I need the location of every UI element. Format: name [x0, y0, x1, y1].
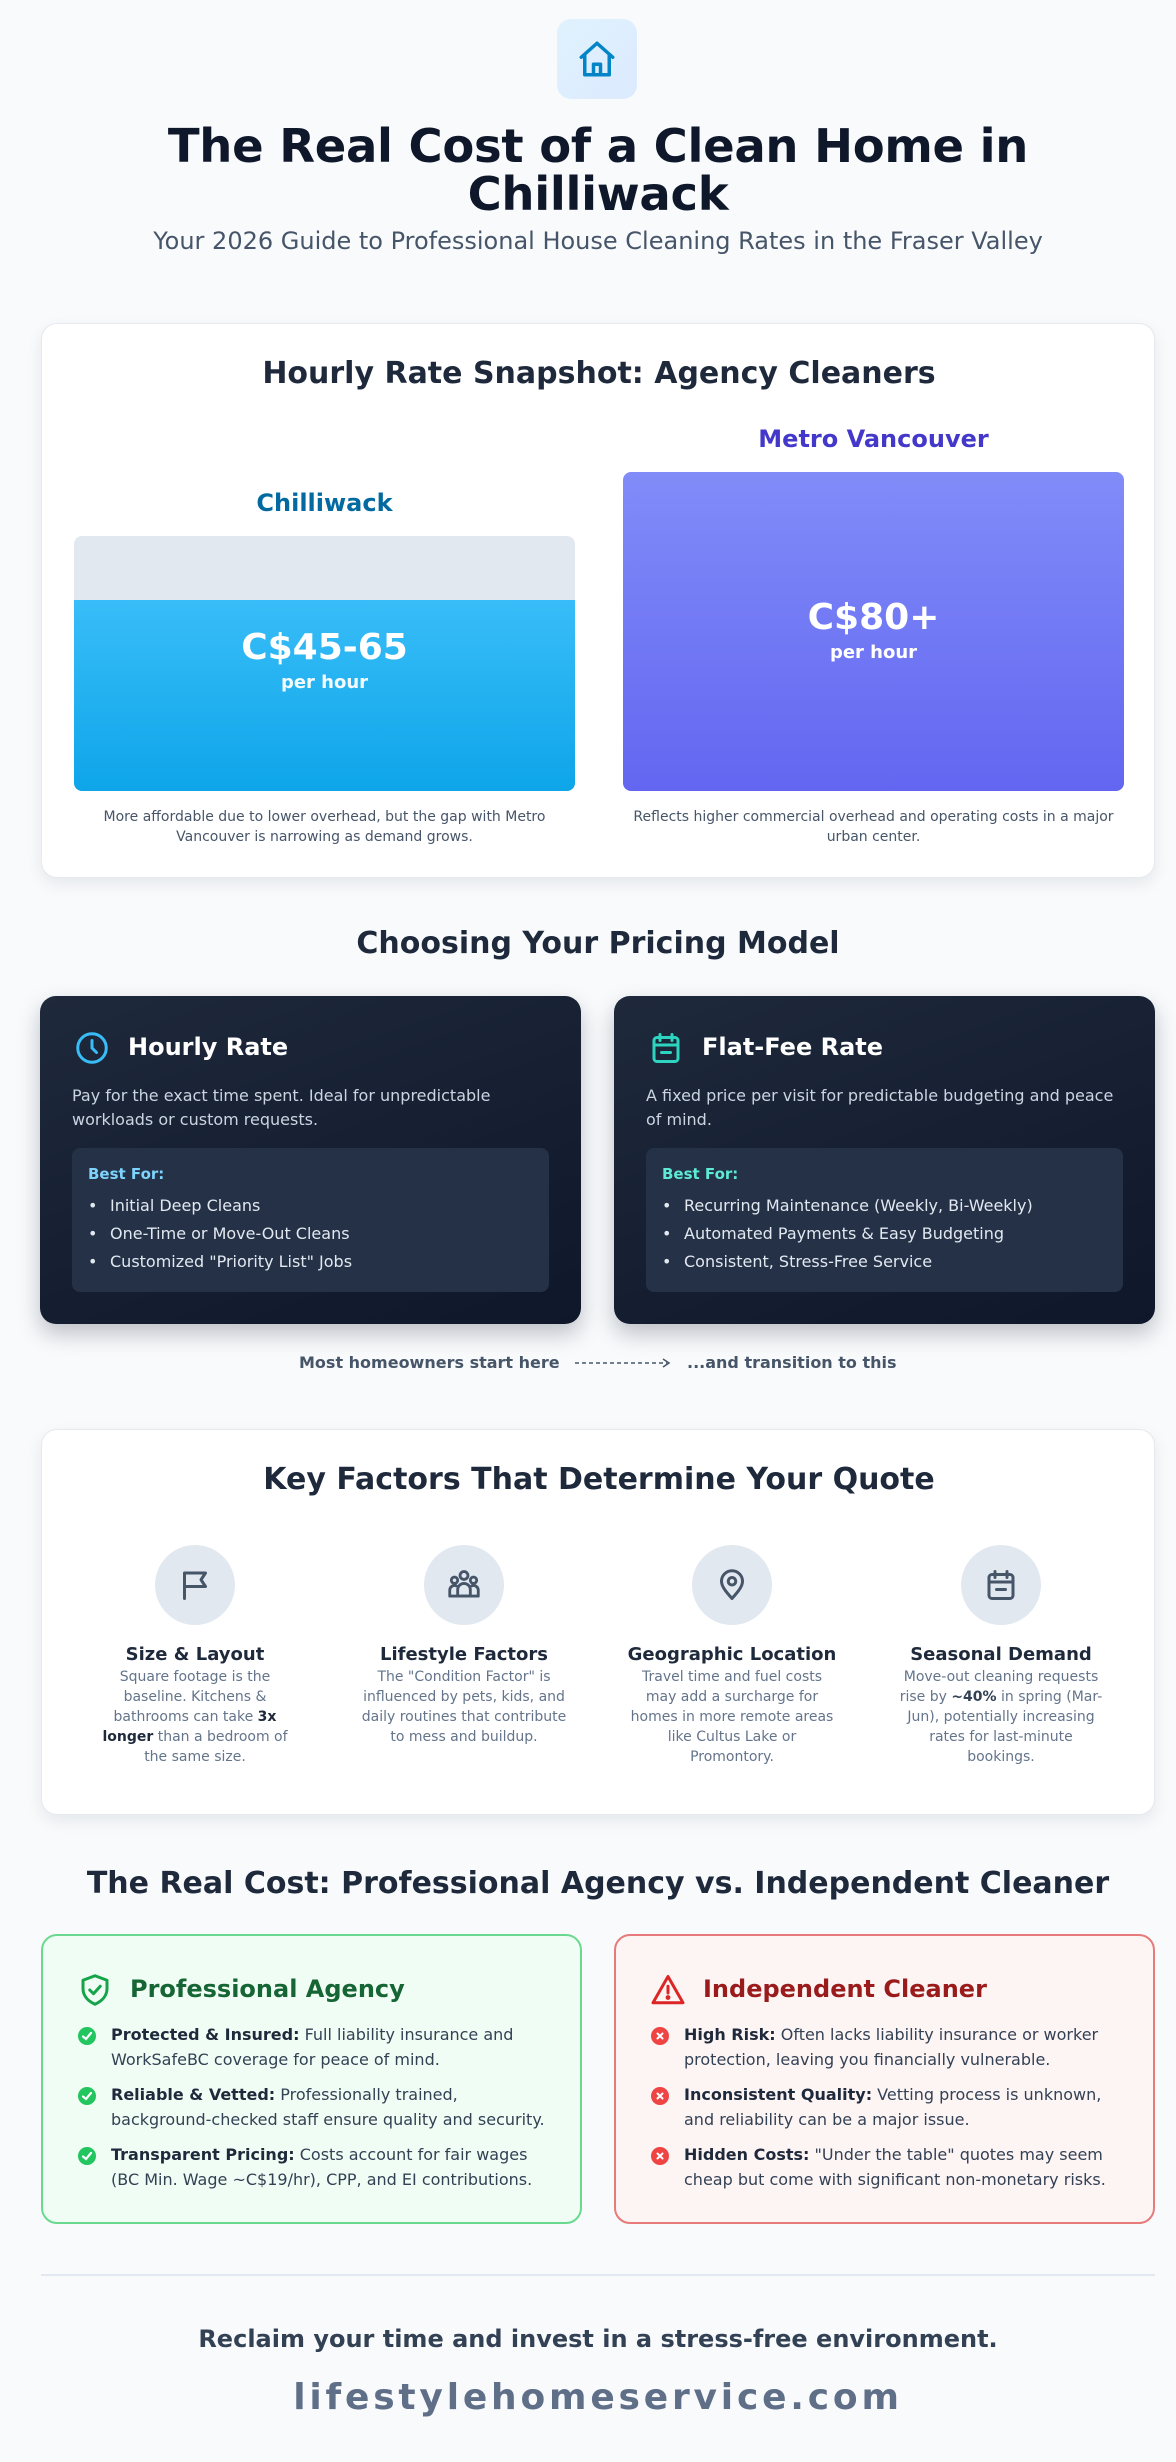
factor: size & layout: [102, 1545, 288, 1765]
title: Chilliwack: [468, 167, 728, 221]
best for list: [72, 1148, 549, 1292]
icon: calendar: [652, 1033, 680, 1063]
factor: seasonal: Move-out cleaning requests rise by ~40% in spring (Mar-Jun), potentially increasing rates for last-minute bookings.: [900, 1669, 1102, 1765]
title: [168, 119, 1028, 221]
icon: shield: [82, 1974, 108, 2006]
bar: Metro Vancouver: per hour: [830, 642, 917, 663]
bar: Metro Vancouver: C$80+: [808, 597, 939, 638]
website url: lifestylehomeservice.com: [293, 2377, 903, 2418]
bar: Chilliwack: C$45-65: [241, 627, 408, 668]
panel: professional agency: Reliable & Vetted: Professionally trained, background-checked staff ensure quality and security.: [111, 2085, 545, 2129]
panel: flat-fee rate: A fixed price per visit for predictable budgeting and peace of mind.: [646, 1086, 1113, 1129]
heading: pricing model: Choosing Your Pricing Model: [356, 926, 840, 961]
factor: lifestyle: The "Condition Factor" is influenced by pets, kids, and daily routines that contribute to mess and buildup.: [362, 1669, 566, 1745]
bar: Metro Vancouver: [623, 472, 1124, 791]
best for list: Automated Payments & Easy Budgeting: [684, 1224, 1004, 1243]
panel: flat-fee rate: [614, 996, 1155, 1324]
factor: lifestyle: [362, 1545, 566, 1745]
title: The Real Cost of a Clean Home in: [168, 119, 1028, 173]
best for list: Best For:: [662, 1165, 738, 1183]
panel: independent cleaner: High Risk: Often lacks liability insurance or worker protection, leaving you financially vulnerable.: [684, 2025, 1098, 2069]
caption: Chilliwack: More affordable due to lower overhead, but the gap with Metro Vancouver is narrowing as demand grows.: [104, 809, 545, 845]
factor: lifestyle: Lifestyle Factors: [380, 1644, 548, 1665]
panel: flat-fee rate: Flat-Fee Rate: [702, 1033, 883, 1061]
bar: Chilliwack: per hour: [281, 672, 368, 693]
panel: hourly rate snapshot: [41, 323, 1155, 878]
icon: clock: [76, 1032, 108, 1064]
best for list: Recurring Maintenance (Weekly, Bi-Weekly): [684, 1196, 1033, 1215]
panel: key factors: [41, 1429, 1155, 1815]
factor: size & layout: Square footage is the baseline. Kitchens & bathrooms can take 3x longer than a bedroom of the same size.: [102, 1669, 288, 1765]
label: Metro Vancouver: Metro Vancouver: [758, 425, 989, 453]
best for list: [646, 1148, 1123, 1292]
heading: key factors: Key Factors That Determine Your Quote: [263, 1462, 935, 1497]
factor: location: Travel time and fuel costs may add a surcharge for homes in more remote areas like Cultus Lake or Promontory.: [631, 1669, 833, 1765]
icon: house: [557, 19, 637, 99]
best for list: Best For:: [88, 1165, 164, 1183]
panel: independent cleaner: Inconsistent Quality: Vetting process is unknown, and reliability can be a major issue.: [684, 2085, 1101, 2129]
best for list: Customized "Priority List" Jobs: [110, 1252, 352, 1271]
label: Chilliwack: Chilliwack: [256, 489, 393, 517]
transition note with arrow: ...and transition to this: [687, 1353, 897, 1372]
best for list: Initial Deep Cleans: [110, 1196, 260, 1215]
factor: location: [628, 1545, 836, 1765]
bar: Chilliwack: [74, 536, 575, 791]
tagline: Reclaim your time and invest in a stress-free environment.: [198, 2325, 998, 2353]
subtitle: Your 2026 Guide to Professional House Cleaning Rates in the Fraser Valley: [153, 227, 1043, 255]
panel: hourly rate: Pay for the exact time spent. Ideal for unpredictable workloads or custom requests.: [72, 1086, 490, 1129]
panel: independent cleaner: Hidden Costs: "Under the table" quotes may seem cheap but come with significant non-monetary risks.: [684, 2145, 1106, 2189]
panel: hourly rate: Hourly Rate: [128, 1033, 288, 1061]
heading: agency vs independent: The Real Cost: Professional Agency vs. Independent Cleaner: [87, 1866, 1109, 1901]
best for list: Consistent, Stress-Free Service: [684, 1252, 932, 1271]
caption: Metro Vancouver: Reflects higher commercial overhead and operating costs in a major urban center.: [633, 809, 1114, 845]
panel: professional agency: [41, 1934, 582, 2224]
factor: seasonal: [900, 1545, 1102, 1765]
best for list: One-Time or Move-Out Cleans: [110, 1224, 350, 1243]
factor: seasonal: Seasonal Demand: [910, 1644, 1092, 1665]
heading: snapshot: Hourly Rate Snapshot: Agency Cleaners: [262, 356, 936, 391]
factor: location: Geographic Location: [628, 1644, 836, 1665]
factor: size & layout: Size & Layout: [126, 1644, 264, 1665]
icon: warning: [652, 1974, 685, 2004]
panel: professional agency: Professional Agency: [130, 1975, 405, 2003]
panel: independent cleaner: Independent Cleaner: [703, 1975, 987, 2003]
panel: hourly rate: [40, 996, 581, 1324]
panel: independent cleaner: [614, 1934, 1155, 2224]
transition note with arrow: [299, 1353, 897, 1372]
panel: professional agency: Transparent Pricing: Costs account for fair wages (BC Min. Wage ~C$19/hr), CPP, and EI contributions.: [111, 2145, 532, 2189]
transition note with arrow: Most homeowners start here: [299, 1353, 560, 1372]
panel: professional agency: Protected & Insured: Full liability insurance and WorkSafeBC coverage for peace of mind.: [111, 2025, 513, 2069]
